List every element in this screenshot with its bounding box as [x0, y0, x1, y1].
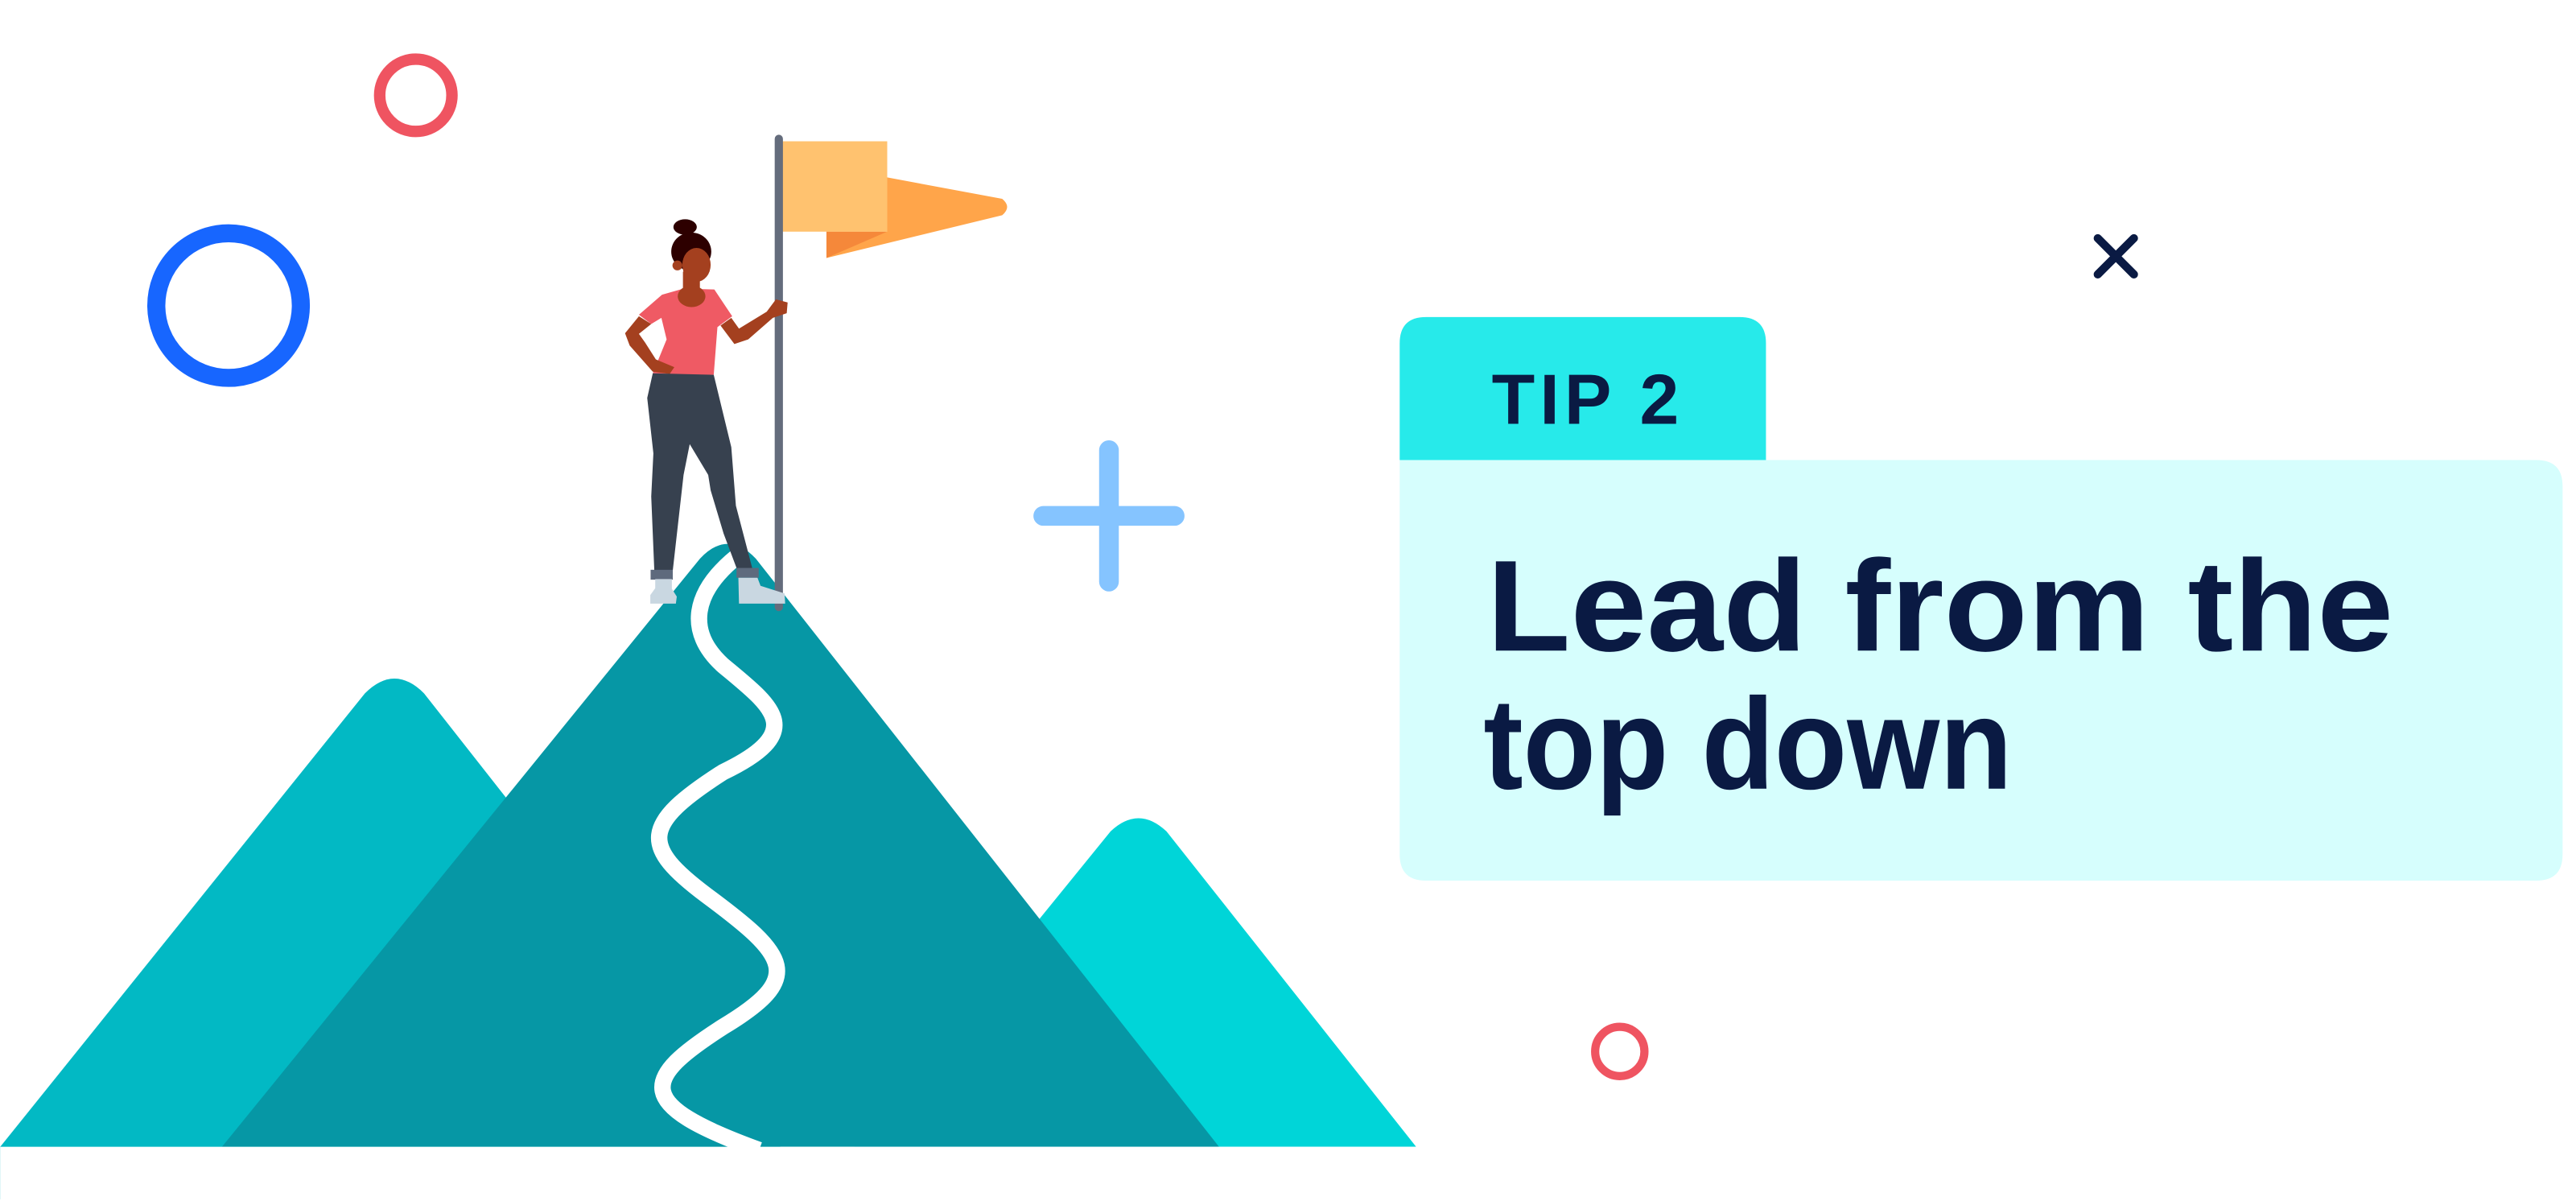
heading: top down — [1483, 672, 2013, 817]
ground line — [0, 1147, 1429, 1201]
heading: Lead from the — [1486, 534, 2393, 679]
mountain: left — [0, 679, 822, 1199]
decor: small red ring — [1595, 1027, 1644, 1076]
person — [625, 219, 788, 604]
decor: navy x — [2098, 238, 2134, 274]
tip card — [1399, 460, 2562, 881]
decor: blue ring — [156, 233, 301, 378]
decor: red ring top — [380, 59, 452, 131]
flag — [782, 142, 1007, 258]
winding path — [659, 552, 777, 1150]
mountain: right — [855, 818, 1416, 1147]
mountain: center — [222, 544, 1219, 1147]
flag pole — [775, 134, 783, 611]
tip label: TIP 2 — [1492, 361, 1679, 440]
decor: blue plus — [1043, 450, 1175, 582]
tip tab — [1399, 317, 1766, 460]
